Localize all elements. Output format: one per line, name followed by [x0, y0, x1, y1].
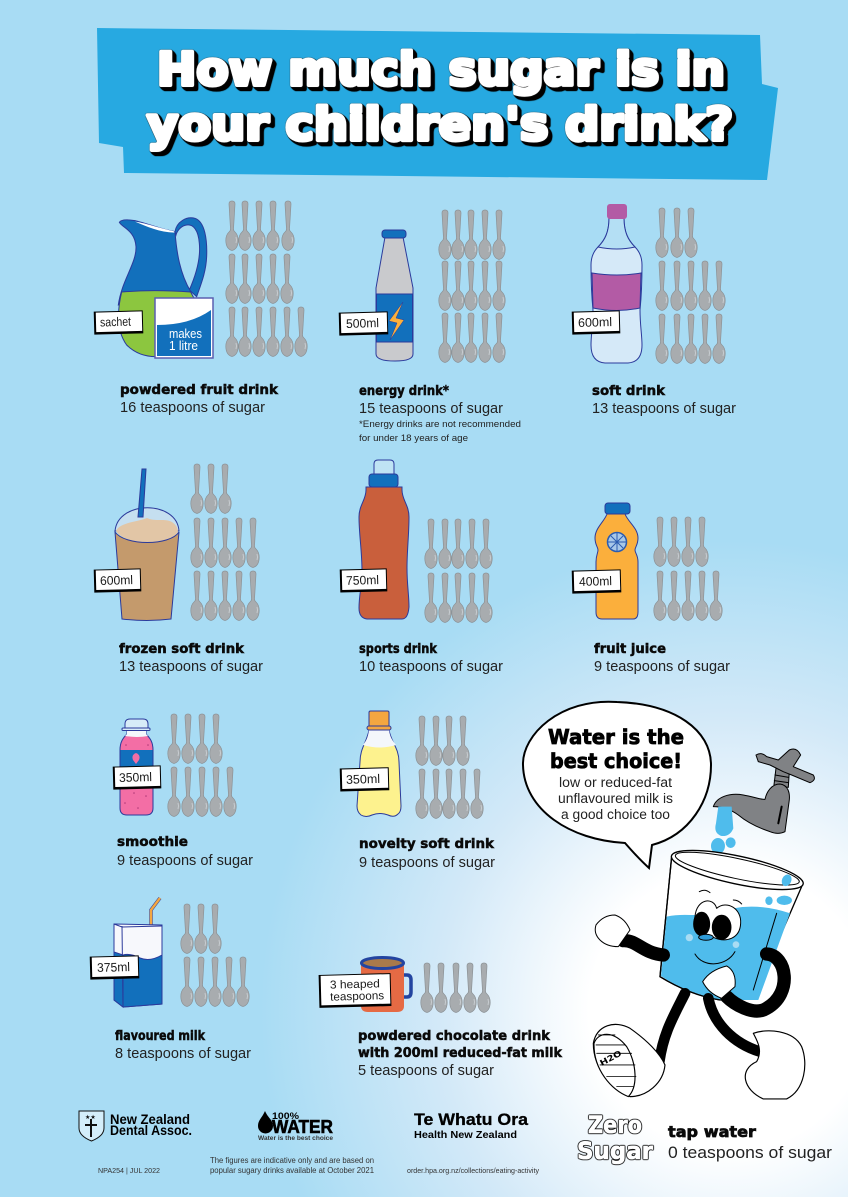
label: 375ml — [90, 955, 139, 980]
logo: Te Whatu Ora: Health New Zealand — [414, 1129, 517, 1141]
label: 350ml — [113, 765, 161, 790]
icon: milk carton — [114, 898, 162, 1007]
spoons: 9 teaspoons — [416, 716, 483, 818]
label: 600ml: 600ml — [578, 315, 612, 330]
callout: water is the best choice: low or reduced-fat — [559, 775, 672, 790]
caption: powdered chocolate drink: with 200ml reduced-fat milk — [358, 1045, 563, 1061]
panel: powdered fruit drink — [94, 201, 307, 416]
label: 400ml — [572, 569, 621, 594]
logo: 100% water: WATER — [272, 1117, 333, 1137]
caption: tap water: tap water — [668, 1123, 756, 1141]
callout: water is the best choice — [523, 702, 711, 868]
logo: New Zealand Dental Assoc: ★★ — [85, 1114, 96, 1121]
glass — [660, 857, 802, 1000]
caption: energy drink: for under 18 years of age — [359, 433, 468, 444]
icon: jug — [118, 218, 207, 357]
panel: fruit juice — [572, 503, 730, 675]
label: 375ml: 375ml — [97, 960, 130, 975]
label: 600ml — [572, 310, 620, 335]
caption: frozen soft drink — [119, 641, 263, 675]
caption: fruit juice: 9 teaspoons of sugar — [594, 658, 730, 675]
label: 3 heaped teaspoons: teaspoons — [330, 990, 385, 1004]
title banner — [97, 28, 778, 180]
icon: sachet: makes — [169, 327, 202, 341]
spoons: 13 teaspoons — [191, 464, 259, 620]
icon: frozen cup — [115, 469, 179, 620]
spoons: 10 teaspoons — [425, 519, 492, 622]
icon: energy bottle — [376, 230, 413, 361]
label: 600ml: 600ml — [100, 573, 133, 588]
footer: url: order.hpa.org.nz/collections/eating-activity — [407, 1166, 539, 1175]
caption: flavoured milk — [115, 1028, 251, 1062]
caption: sports drink: 10 teaspoons of sugar — [359, 658, 503, 675]
hands — [595, 915, 735, 998]
caption: frozen soft drink: 13 teaspoons of sugar — [119, 658, 263, 675]
caption: powdered chocolate drink — [358, 1028, 563, 1079]
caption: powdered fruit drink — [120, 382, 279, 416]
label: 400ml: 400ml — [579, 574, 612, 589]
logo: Te Whatu Ora: Te Whatu Ora — [414, 1111, 529, 1129]
panel: smoothie — [113, 714, 253, 869]
logo: Te Whatu Ora — [414, 1111, 529, 1141]
spoons: 15 teaspoons — [439, 210, 505, 362]
label: 350ml: 350ml — [119, 770, 152, 785]
callout: water is the best choice: a good choice too — [561, 807, 670, 822]
icon: soft drink bottle — [591, 204, 642, 363]
icon: water glass character and tap — [593, 749, 814, 1099]
caption: powdered fruit drink: 16 teaspoons of sugar — [120, 399, 265, 416]
panel: energy drink — [339, 210, 521, 444]
caption: frozen soft drink: frozen soft drink — [119, 641, 245, 657]
label: 3 heaped teaspoons: 3 heaped — [330, 978, 380, 992]
footer: disclaimer: popular sugary drinks available at October 2021 — [210, 1166, 375, 1175]
icon: sports bottle — [359, 460, 409, 619]
panel: frozen soft drink — [94, 464, 263, 675]
logo: 100% water: 100% — [272, 1111, 299, 1121]
caption: novelty soft drink — [359, 836, 495, 871]
caption: tap water — [668, 1123, 832, 1162]
caption: flavoured milk: flavoured milk — [115, 1028, 206, 1044]
panel: flavoured milk — [90, 898, 251, 1062]
title — [147, 43, 733, 151]
label: 350ml: 350ml — [346, 772, 380, 787]
panel: soft drink — [572, 204, 736, 417]
spoons: 5 teaspoons — [421, 963, 490, 1012]
logo: Zero Sugar: Zero — [588, 1111, 642, 1139]
icon: sachet: 1 litre — [169, 339, 198, 353]
caption: sports drink — [359, 641, 503, 675]
icon: water glass character and tap: H2O — [598, 1049, 623, 1068]
caption: powdered chocolate drink: 5 teaspoons of sugar — [358, 1062, 494, 1079]
label: 750ml — [340, 568, 387, 593]
icon: novelty bottle — [357, 711, 401, 816]
caption: powdered fruit drink: powdered fruit drink — [120, 382, 279, 398]
title: How much sugar is in — [157, 43, 725, 96]
caption: energy drink: *Energy drinks are not recommended — [359, 419, 521, 430]
footer: disclaimer: The figures are indicative only and are based on — [210, 1156, 374, 1165]
caption: tap water: 0 teaspoons of sugar — [668, 1143, 832, 1162]
label: 500ml — [339, 311, 388, 336]
caption: smoothie: 9 teaspoons of sugar — [117, 852, 253, 869]
caption: fruit juice — [594, 641, 730, 675]
caption: soft drink — [592, 383, 736, 417]
title: your children's drink? — [147, 98, 733, 151]
label: 750ml: 750ml — [346, 573, 379, 588]
caption: novelty soft drink: 9 teaspoons of sugar — [359, 854, 495, 871]
caption: novelty soft drink: novelty soft drink — [359, 836, 495, 852]
icon: mug — [361, 958, 411, 1012]
callout: water is the best choice: best choice! — [550, 749, 682, 773]
logo: 100% water — [258, 1111, 334, 1142]
caption: energy drink: 15 teaspoons of sugar — [359, 400, 503, 417]
spoons: 9 teaspoons — [654, 517, 722, 620]
label: sachet — [94, 310, 143, 335]
icon: tap — [713, 749, 814, 833]
water stream — [711, 807, 736, 854]
logo: New Zealand Dental Assoc: Dental Assoc. — [110, 1123, 192, 1138]
caption: smoothie: smoothie — [117, 834, 188, 850]
label: sachet: sachet — [100, 315, 132, 329]
footer: code: NPA254 | JUL 2022 — [98, 1166, 160, 1175]
shoes — [593, 1024, 805, 1099]
label: 350ml — [340, 767, 389, 791]
footer: disclaimer — [210, 1156, 375, 1175]
logo: Zero Sugar: Sugar — [577, 1137, 653, 1165]
caption: sports drink: sports drink — [359, 641, 438, 657]
icon: smoothie bottle — [120, 719, 153, 815]
spoons: 13 teaspoons — [656, 208, 725, 364]
label: 600ml — [94, 568, 141, 593]
icon: juice bottle — [595, 503, 638, 619]
logo: New Zealand Dental Assoc: New Zealand — [110, 1112, 190, 1127]
spoons: 16 teaspoons — [226, 201, 307, 356]
caption: flavoured milk: 8 teaspoons of sugar — [115, 1045, 251, 1062]
label: 3 heaped teaspoons — [319, 973, 391, 1008]
logo: Zero Sugar — [577, 1111, 653, 1165]
callout: water is the best choice: unflavoured milk is — [558, 791, 673, 806]
spoons: 9 teaspoons — [168, 714, 236, 816]
panel: powdered chocolate drink — [319, 958, 563, 1079]
face — [694, 890, 742, 964]
spoons: 8 teaspoons — [181, 904, 249, 1006]
panel: sports drink — [340, 460, 503, 675]
caption: soft drink: soft drink — [592, 383, 666, 399]
logo: 100% water: Water is the best choice — [258, 1136, 334, 1142]
icon: sachet — [155, 298, 213, 358]
label: 500ml: 500ml — [346, 316, 379, 331]
callout: water is the best choice: Water is the — [548, 725, 684, 749]
caption: smoothie — [117, 834, 253, 869]
logo: New Zealand Dental Assoc — [79, 1111, 192, 1141]
caption: powdered chocolate drink: powdered chocolate drink — [358, 1028, 551, 1044]
caption: energy drink — [359, 383, 521, 444]
panel: novelty soft drink — [340, 711, 495, 871]
caption: fruit juice: fruit juice — [594, 641, 666, 657]
caption: energy drink: energy drink* — [359, 383, 449, 399]
arms and legs — [623, 941, 784, 1062]
caption: soft drink: 13 teaspoons of sugar — [592, 400, 736, 417]
